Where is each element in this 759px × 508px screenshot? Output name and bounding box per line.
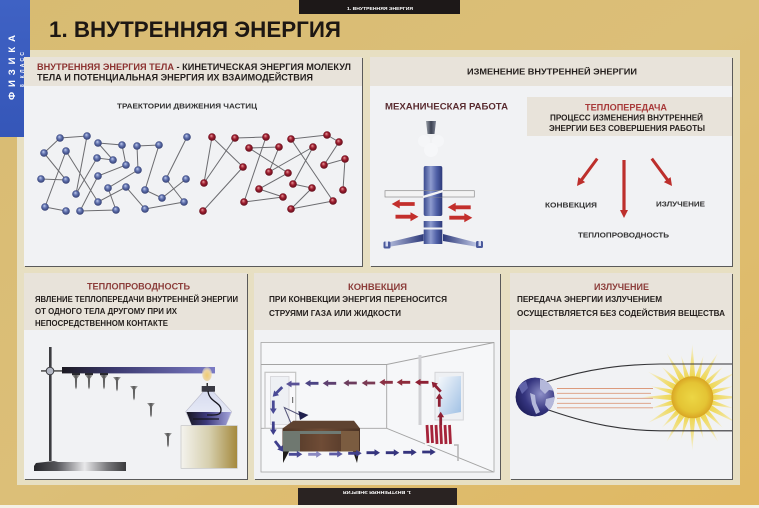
radiator [425, 424, 458, 461]
side tab: subject [0, 0, 30, 137]
top tab: 1. ВНУТРЕННЯЯ ЭНЕРГИЯ [347, 6, 413, 11]
earth [516, 378, 555, 416]
diagram: room interior [261, 342, 494, 472]
text: conduction definition: ЯВЛЕНИЕ ТЕПЛОПЕРЕДАЧИ ВНУТРЕННЕЙ ЭНЕРГИИ [35, 295, 238, 304]
diagram: blue particles trajectories [37, 132, 191, 215]
pipe [418, 355, 422, 425]
panel: change of internal energy [370, 57, 733, 267]
window [435, 372, 463, 420]
door [265, 372, 296, 428]
text: convection definition: ПРИ КОНВЕКЦИИ ЭНЕРГИЯ ПЕРЕНОСИТСЯ [269, 295, 447, 304]
callout: heat transfer: ПРОЦЕСС ИЗМЕНЕНИЯ ВНУТРЕННЕЙ [550, 114, 703, 122]
callout: heat transfer: ТЕПЛОПЕРЕДАЧА [585, 102, 668, 112]
top tab [299, 0, 460, 14]
text: radiation definition: ОСУЩЕСТВЛЯЕТСЯ БЕЗ СОДЕЙСТВИЯ ВЕЩЕСТВА [517, 309, 725, 318]
heading: radiation: ИЗЛУЧЕНИЕ [594, 282, 649, 292]
radiation rays [557, 388, 653, 408]
arrow: to conduction [620, 160, 628, 218]
text: conduction definition: НЕПОСРЕДСТВЕННОМ КОНТАКТЕ [35, 319, 168, 328]
text: convection definition [269, 295, 447, 318]
label: radiation: ИЗЛУЧЕНИЕ [656, 200, 705, 208]
diagram: spirit lamp on block [181, 367, 237, 468]
callout: heat transfer: ЭНЕРГИИ БЕЗ СОВЕРШЕНИЯ РАБОТЫ [549, 124, 705, 133]
sun [642, 345, 732, 450]
text: convection definition: СТРУЯМИ ГАЗА ИЛИ ЖИДКОСТИ [269, 309, 401, 318]
side tab: subject: ФИЗИКА [7, 35, 18, 100]
heading: definition: ВНУТРЕННЯЯ ЭНЕРГИЯ ТЕЛА - КИНЕТИЧЕСКАЯ ЭНЕРГИЯ МОЛЕКУЛ [37, 62, 351, 72]
diagram: lab stand with rod and nails [34, 347, 215, 471]
callout: heat transfer [527, 97, 732, 136]
arrow: to convection [574, 156, 601, 188]
text: radiation definition [517, 295, 725, 318]
label: trajectories: ТРАЕКТОРИИ ДВИЖЕНИЯ ЧАСТИЦ [117, 102, 258, 110]
text: conduction definition [35, 295, 238, 328]
panel: conduction [24, 273, 248, 480]
bottom tab [298, 488, 457, 505]
label: convection: КОНВЕКЦИЯ [545, 200, 597, 210]
desk [282, 421, 360, 463]
heading: conduction: ТЕПЛОПРОВОДНОСТЬ [87, 282, 191, 292]
label: conduction: ТЕПЛОПРОВОДНОСТЬ [578, 230, 670, 240]
convection arrows [270, 379, 444, 458]
heading: convection: КОНВЕКЦИЯ [348, 281, 407, 292]
text: conduction definition: ОТ ОДНОГО ТЕЛА ДРУГОМУ ПРИ ИХ [35, 307, 178, 316]
text: radiation definition: ПЕРЕДАЧА ЭНЕРГИИ ИЗЛУЧЕНИЕМ [517, 295, 662, 304]
heading: mechanical work: МЕХАНИЧЕСКАЯ РАБОТА [385, 102, 509, 112]
diagram: red particles trajectories [199, 131, 349, 215]
bottom tab: 1. ВНУТРЕННЯЯ ЭНЕРГИЯ [342, 489, 411, 495]
heading: change of energy: ИЗМЕНЕНИЕ ВНУТРЕННЕЙ ЭНЕРГИИ [467, 66, 637, 76]
diagram: fire-tube piston device [384, 121, 483, 248]
desk lamp [284, 408, 308, 425]
orbit [543, 364, 732, 431]
title: 1. ВНУТРЕННЯЯ ЭНЕРГИЯ [49, 17, 341, 42]
side tab: subject: 8 КЛАСС [20, 52, 26, 87]
panel: internal energy definition [24, 57, 363, 267]
diagram: earth orbit and sun [516, 344, 744, 451]
arrow: to radiation [648, 156, 675, 188]
panel: radiation [510, 273, 744, 480]
panel: convection [254, 273, 501, 480]
heading: definition line 2: ТЕЛА И ПОТЕНЦИАЛЬНАЯ ЭНЕРГИЯ ИХ ВЗАИМОДЕЙСТВИЯ [37, 72, 313, 82]
